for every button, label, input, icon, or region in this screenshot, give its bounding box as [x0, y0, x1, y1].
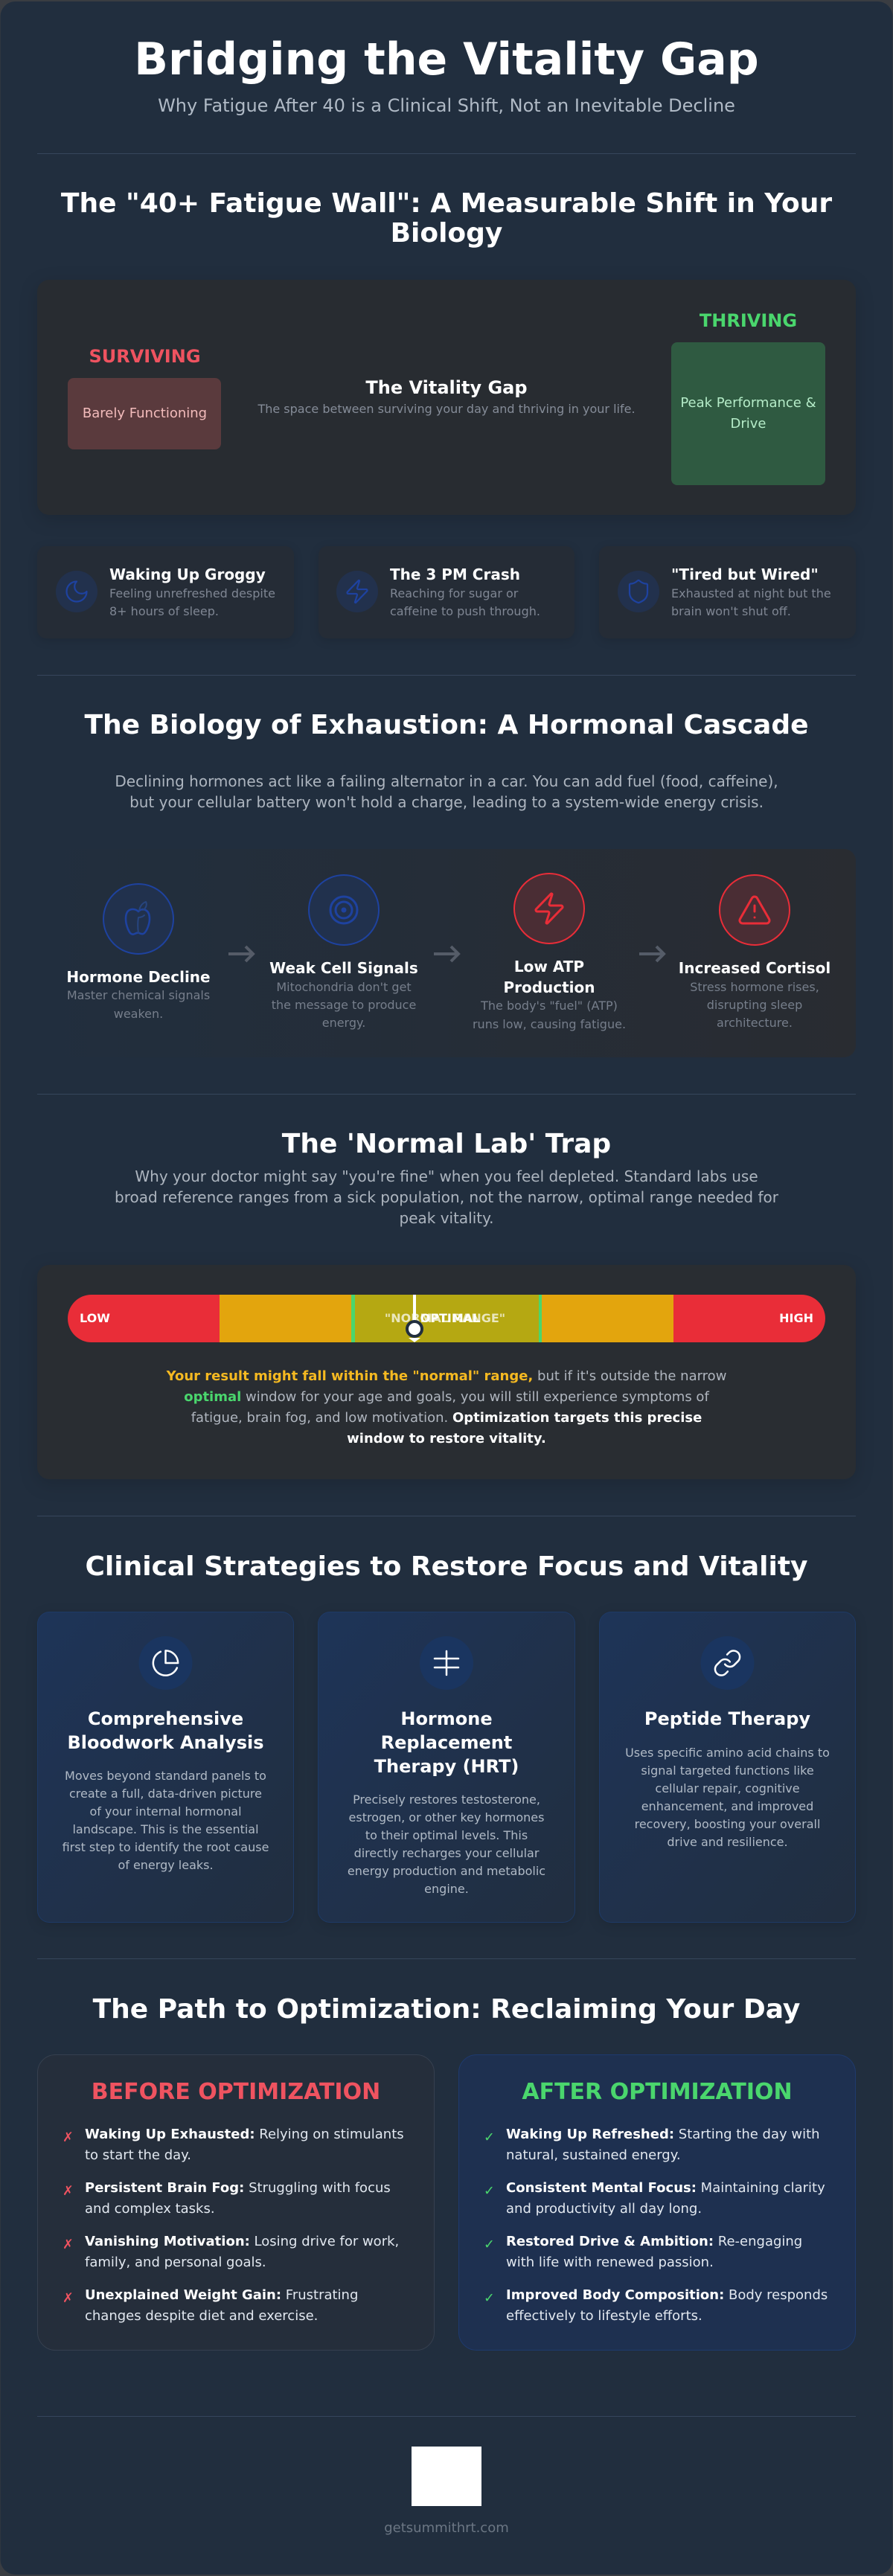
card: hrt: Therapy (HRT) [374, 1756, 519, 1777]
list: after items: ✓ [484, 2184, 495, 2199]
lab trap intro text: Why your doctor might say "you're fine" when you feel depleted. Standard labs use [135, 1167, 758, 1185]
card: bloodwork: first step to identify the root cause [63, 1840, 269, 1854]
arrow [434, 946, 459, 961]
list: before items: Losing drive for work, [255, 2234, 399, 2249]
card: peptide: cellular repair, cognitive [655, 1781, 800, 1795]
card: hrt: estrogen, or other key hormones [349, 1810, 544, 1824]
list: after items: natural, sustained energy. [506, 2147, 681, 2163]
card: hrt [319, 1612, 574, 1923]
icon: link [701, 1636, 755, 1690]
symptom card: 3 pm crash [319, 546, 574, 638]
list: before items: to start the day. [85, 2147, 191, 2163]
list: after items: ✓ [484, 2291, 495, 2306]
title: Bridging the Vitality Gap [134, 33, 759, 86]
card: peptide [600, 1612, 856, 1923]
card: bloodwork: of energy leaks. [118, 1858, 214, 1872]
card: bloodwork [37, 1612, 293, 1923]
step: increased cortisol: architecture. [717, 1016, 793, 1030]
list: after items: ✓ [484, 2130, 495, 2145]
card: bloodwork: Moves beyond standard panels to [65, 1769, 266, 1783]
list: after items [484, 2127, 828, 2324]
range explanation: fatigue, brain fog, and low motivation. Optimization targets this precise [191, 1410, 702, 1426]
cascade intro text: but your cellular battery won't hold a charge, leading to a system-wide energy crisis. [129, 793, 764, 811]
symptom card: 3 pm crash: Reaching for sugar or [390, 586, 519, 600]
icon: shield [618, 571, 659, 612]
panel: after optimization [458, 2055, 856, 2350]
panel: before optimization: BEFORE OPTIMIZATION [92, 2079, 380, 2105]
step: hormone decline: Hormone Decline [66, 968, 211, 986]
icon: lightning [514, 874, 584, 943]
marker [407, 1295, 422, 1342]
step: weak cell signals [269, 875, 418, 1030]
step: increased cortisol: Increased Cortisol [679, 959, 830, 977]
icon: apple [103, 884, 173, 954]
card: hrt: Hormone [400, 1708, 493, 1729]
list: after items: Consistent Mental Focus: [506, 2180, 697, 2196]
symptom card: waking up groggy: 8+ hours of sleep. [109, 604, 219, 618]
step: weak cell signals: Mitochondria don't get [276, 980, 412, 994]
list: before items [63, 2127, 404, 2324]
card: bloodwork: landscape. This is the essential [72, 1822, 259, 1836]
list: before items: ✗ [63, 2237, 74, 2252]
range bar chart: LOW [80, 1311, 110, 1325]
symptom card: waking up groggy [37, 546, 294, 638]
icon: balance lines [420, 1636, 473, 1690]
step: increased cortisol [679, 875, 830, 1030]
gap description: The Vitality Gap [365, 377, 528, 398]
surviving label: SURVIVING [89, 346, 201, 367]
arrow [639, 946, 665, 961]
range bar chart: HIGH [779, 1311, 813, 1325]
icon: lightning [336, 571, 378, 612]
list: after items: Body responds [729, 2287, 828, 2303]
logo placeholder [412, 2447, 481, 2506]
list: before items: ✗ [63, 2184, 74, 2199]
symptom card: tired but wired: brain won't shut off. [671, 604, 791, 618]
icon: target [309, 875, 379, 945]
list: before items: changes despite diet and exercise. [85, 2308, 318, 2324]
heading: fatigue wall: The "40+ Fatigue Wall": A Measurable Shift in Your [61, 188, 832, 219]
list: after items: Starting the day with [679, 2127, 820, 2142]
range bar chart: "NORMAL RANGE" [385, 1311, 505, 1325]
surviving bar: Barely Functioning [83, 406, 207, 421]
list: before items: Waking Up Exhausted: [85, 2127, 255, 2142]
range explanation: Your result might fall within the "normal" range, but if it's outside the narrow [167, 1368, 726, 1384]
card: hrt: energy production and metabolic [348, 1864, 545, 1878]
list: before items: Frustrating [286, 2287, 358, 2303]
list: before items: Persistent Brain Fog: [85, 2180, 244, 2196]
step: increased cortisol: Stress hormone rises, [690, 980, 819, 994]
card: peptide: Peptide Therapy [644, 1708, 810, 1729]
list: before items: Relying on stimulants [259, 2127, 404, 2142]
card: bloodwork: of your internal hormonal [89, 1804, 242, 1819]
thriving bar: Drive [731, 416, 766, 432]
step: weak cell signals: energy. [322, 1016, 365, 1030]
panel: before optimization [37, 2055, 435, 2350]
range bar chart [68, 1295, 825, 1342]
symptom card: waking up groggy: Feeling unrefreshed despite [109, 586, 275, 600]
step: weak cell signals: the message to produce [272, 998, 416, 1012]
panel: after optimization: AFTER OPTIMIZATION [522, 2079, 793, 2105]
list: before items: Unexplained Weight Gain: [85, 2287, 281, 2303]
list: before items: ✗ [63, 2291, 74, 2306]
list: after items: Improved Body Composition: [506, 2287, 724, 2303]
heading: normal lab trap: The 'Normal Lab' Trap [282, 1129, 611, 1159]
list: before items: and complex tasks. [85, 2201, 215, 2217]
arrow [228, 946, 254, 961]
list: after items: Waking Up Refreshed: [506, 2127, 674, 2142]
thriving bar: Peak Performance & [680, 395, 816, 411]
card: bloodwork: Comprehensive [88, 1708, 243, 1729]
panel: vitality gap [37, 280, 856, 515]
thriving bar [671, 342, 825, 485]
thriving label: THRIVING [700, 310, 797, 331]
list: after items: Re-engaging [718, 2234, 802, 2249]
lab trap intro text: peak vitality. [400, 1209, 493, 1227]
range bar chart: OPTIMAL [420, 1311, 480, 1325]
step: weak cell signals: Weak Cell Signals [269, 959, 418, 977]
gap description: The space between surviving your day and thriving in your life. [257, 402, 636, 416]
list: after items: and productivity all day long. [506, 2201, 702, 2217]
card: bloodwork: create a full, data-driven picture [69, 1787, 262, 1801]
symptom card: tired but wired: "Tired but Wired" [671, 565, 819, 583]
step: low atp: Production [503, 978, 595, 996]
range explanation: optimal window for your age and goals, you will still experience symptoms of [184, 1389, 709, 1405]
card: hrt: Precisely restores testosterone, [353, 1792, 540, 1807]
step: low atp: The body's "fuel" (ATP) [480, 999, 618, 1013]
list: after items: with life with renewed passion. [506, 2255, 714, 2270]
card: hrt: Replacement [381, 1732, 512, 1753]
card: hrt: directly recharges your cellular [354, 1846, 540, 1860]
step: hormone decline: Master chemical signals [67, 988, 210, 1002]
heading: path to optimization: The Path to Optimization: Reclaiming Your Day [93, 1994, 800, 2025]
range explanation: window to restore vitality. [347, 1431, 546, 1446]
symptom card: 3 pm crash: caffeine to push through. [390, 604, 540, 618]
surviving bar [68, 378, 221, 449]
list: before items: Vanishing Motivation: [85, 2234, 250, 2249]
symptom card: waking up groggy: Waking Up Groggy [109, 565, 266, 583]
list: after items: ✓ [484, 2237, 495, 2252]
panel: hormonal cascade flow [37, 849, 856, 1057]
card: peptide: recovery, boosting your overall [635, 1817, 820, 1831]
symptom card: 3 pm crash: The 3 PM Crash [390, 565, 520, 583]
icon: moon [56, 571, 97, 612]
list: after items: effectively to lifestyle efforts. [506, 2308, 702, 2324]
step: hormone decline [66, 884, 211, 1021]
card: hrt: engine. [424, 1882, 469, 1896]
step: hormone decline: weaken. [114, 1007, 163, 1021]
card: peptide: signal targeted functions like [641, 1763, 814, 1778]
symptom card: tired but wired: Exhausted at night but the [671, 586, 831, 600]
subtitle: Why Fatigue After 40 is a Clinical Shift, Not an Inevitable Decline [158, 95, 735, 116]
icon: pie chart [138, 1636, 192, 1690]
list: before items: family, and personal goals. [85, 2255, 266, 2270]
symptom card: tired but wired [599, 546, 856, 638]
list: after items: Maintaining clarity [701, 2180, 825, 2196]
heading: hormonal cascade: The Biology of Exhaustion: A Hormonal Cascade [84, 710, 809, 740]
cascade intro text: Declining hormones act like a failing alternator in a car. You can add fuel (food, caffeine), [115, 772, 778, 790]
panel: lab range [37, 1265, 856, 1479]
list: before items: ✗ [63, 2130, 74, 2145]
icon: warning triangle [720, 875, 790, 945]
card: peptide: drive and resilience. [667, 1835, 788, 1849]
step: low atp: Low ATP [514, 958, 584, 975]
card: peptide: enhancement, and improved [641, 1799, 813, 1813]
step: increased cortisol: disrupting sleep [707, 998, 802, 1012]
step: low atp: runs low, causing fatigue. [473, 1017, 626, 1031]
list: after items: Restored Drive & Ambition: [506, 2234, 714, 2249]
card: peptide: Uses specific amino acid chains to [625, 1746, 830, 1760]
step: low atp [473, 874, 626, 1031]
gap description [257, 377, 636, 416]
heading: clinical strategies: Clinical Strategies to Restore Focus and Vitality [85, 1551, 808, 1582]
heading: fatigue wall: Biology [391, 218, 502, 249]
lab trap intro text: broad reference ranges from a sick population, not the narrow, optimal range needed for [115, 1188, 779, 1206]
list: before items: Struggling with focus [249, 2180, 391, 2196]
card: bloodwork: Bloodwork Analysis [67, 1732, 264, 1753]
card: hrt: to their optimal levels. This [365, 1828, 528, 1842]
footer website: getsummithrt.com [384, 2520, 509, 2536]
